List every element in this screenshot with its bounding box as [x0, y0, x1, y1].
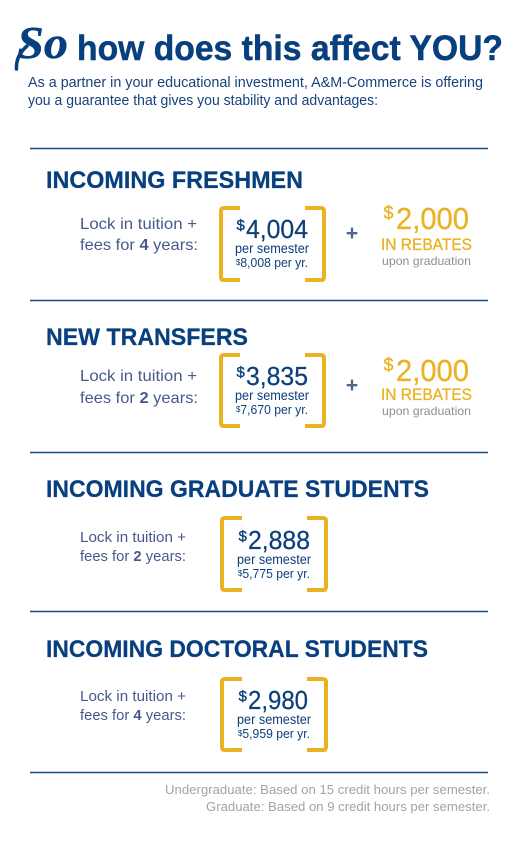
- lock-in text: fees for 4 years:: [80, 237, 197, 254]
- bracket with price: 7,670 per yr.: [240, 402, 308, 417]
- heading: NEW TRANSFERS: [46, 324, 248, 351]
- plus: +: [346, 222, 358, 245]
- bracket with price: [221, 355, 324, 426]
- bracket with price: per semester: [235, 387, 309, 403]
- intro text: you a guarantee that gives you stability and advantages:: [28, 92, 378, 109]
- rebate: IN REBATES: [381, 236, 472, 254]
- bracket with price: [222, 679, 326, 750]
- panel: incoming doctoral students: [46, 636, 428, 750]
- title: [16, 18, 503, 69]
- rebate: IN REBATES: [381, 386, 472, 404]
- bracket with price: 8,008 per yr.: [240, 255, 308, 270]
- bracket with price: per semester: [235, 240, 309, 256]
- rebate: $: [384, 203, 394, 223]
- bracket with price: $: [238, 728, 243, 738]
- bracket with price: $: [238, 528, 248, 545]
- bracket with price: $: [236, 257, 241, 267]
- lock-in text: Lock in tuition +: [80, 216, 197, 233]
- bracket with price: 2,888: [248, 525, 310, 555]
- rebate: upon graduation: [382, 404, 471, 418]
- bracket with price: 5,959 per yr.: [242, 726, 310, 741]
- plus: +: [346, 374, 358, 397]
- heading: INCOMING FRESHMEN: [46, 167, 303, 194]
- bracket with price: 5,775 per yr.: [242, 566, 310, 581]
- lock-in text: fees for 2 years:: [80, 390, 197, 407]
- heading: INCOMING GRADUATE STUDENTS: [46, 476, 429, 503]
- script word: So: So: [17, 18, 68, 68]
- bracket with price: 2,980: [248, 685, 308, 715]
- footnote: Undergraduate: Based on 15 credit hours per semester.: [165, 782, 490, 797]
- lock-in text: fees for 4 years:: [80, 707, 187, 724]
- bracket with price: $: [238, 568, 243, 578]
- intro text: As a partner in your educational investment, A&M-Commerce is offering: [28, 74, 483, 91]
- bracket with price: per semester: [237, 711, 311, 727]
- lock-in text: Lock in tuition +: [80, 368, 197, 385]
- lock-in text: fees for 2 years:: [80, 548, 187, 565]
- intro text: [28, 74, 483, 109]
- rebate: [381, 353, 472, 418]
- panel: incoming graduate students: [46, 476, 429, 590]
- lock-in text: Lock in tuition +: [80, 529, 186, 546]
- bracket with price: [221, 208, 324, 280]
- bracket with price: per semester: [237, 551, 311, 567]
- bracket with price: 3,835: [246, 361, 308, 391]
- bracket with price: $: [238, 688, 248, 705]
- bracket with price: $: [236, 404, 241, 414]
- panel: new transfers: [46, 324, 472, 426]
- bracket with price: 4,004: [246, 214, 308, 244]
- footnote: Graduate: Based on 9 credit hours per semester.: [206, 799, 490, 814]
- heading text: how does this affect YOU?: [77, 29, 503, 68]
- panel: incoming freshmen: [46, 167, 472, 280]
- rebate: [381, 201, 472, 268]
- heading: INCOMING DOCTORAL STUDENTS: [46, 636, 428, 663]
- footnote: [165, 782, 490, 814]
- rebate: 2,000: [396, 201, 469, 236]
- bracket with price: [222, 518, 326, 590]
- bracket with price: $: [236, 364, 246, 381]
- lock-in text: Lock in tuition +: [80, 688, 186, 705]
- rebate: 2,000: [396, 353, 469, 388]
- rebate: upon graduation: [382, 254, 471, 268]
- bracket with price: $: [236, 217, 246, 234]
- rebate: $: [384, 355, 394, 375]
